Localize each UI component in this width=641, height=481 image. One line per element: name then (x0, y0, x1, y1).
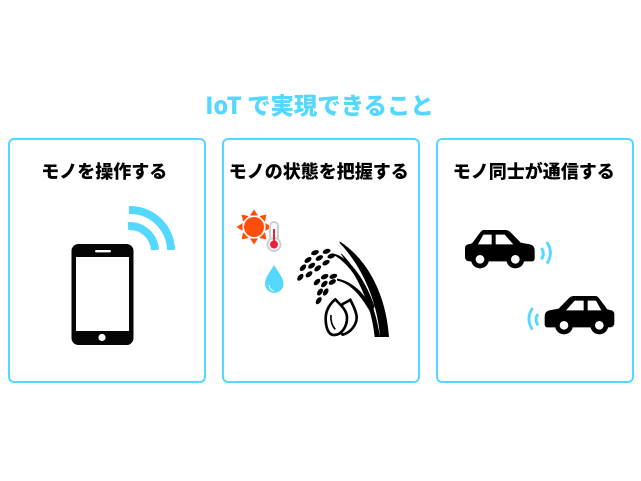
car body (545, 296, 614, 334)
icon: water drop (265, 265, 284, 293)
rice grains (296, 248, 338, 305)
heading: control things: モノを操作する (41, 158, 167, 184)
signal waves (541, 242, 550, 264)
heading: things communicate: モノ同士が通信する (453, 158, 615, 184)
icon: car 2 (529, 296, 614, 334)
icon: car 1 (465, 230, 550, 268)
title: IoT で実現できること (205, 87, 434, 121)
heading: monitor state: モノの状態を把握する (229, 158, 409, 184)
icon: rice plant (296, 241, 389, 337)
icon: sun (236, 210, 272, 244)
panel: control things (8, 138, 206, 382)
rice stalk (335, 241, 389, 337)
icon: thermometer (268, 222, 280, 251)
signal waves (529, 308, 538, 330)
icon: wifi signal (128, 210, 171, 250)
rice seeds (326, 299, 357, 335)
panel: monitor state (222, 138, 420, 382)
icon: smartphone (72, 244, 134, 345)
panel: things communicate (436, 138, 634, 382)
car body (465, 230, 535, 268)
